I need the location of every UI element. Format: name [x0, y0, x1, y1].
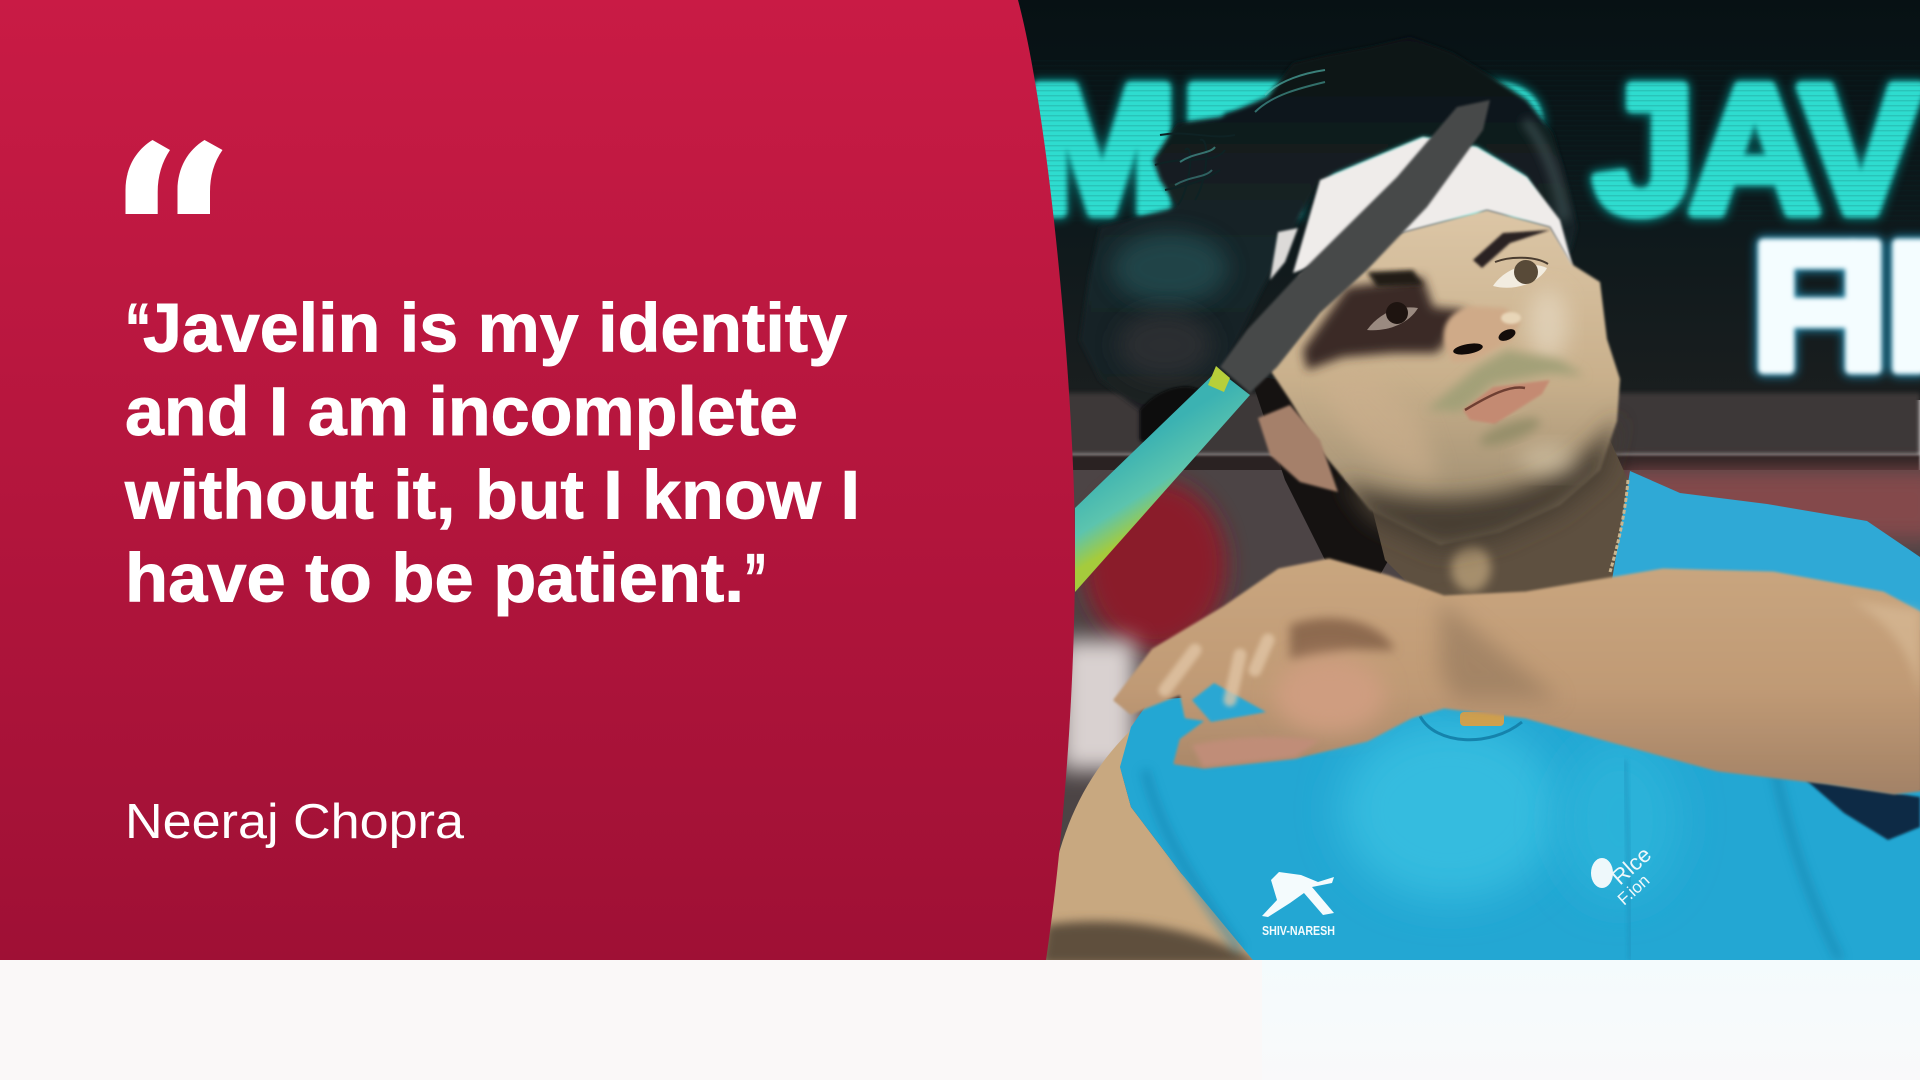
neck [1370, 440, 1628, 605]
photo: javelin thrower [1018, 0, 1920, 960]
scoreboard text [1034, 72, 1920, 384]
quote text: without it, but I know I [124, 456, 860, 534]
shirt logo: runner [1262, 872, 1335, 938]
shirt logo: runner: SHIV-NARESH [1262, 923, 1335, 938]
chin beard patch [1480, 414, 1542, 448]
javelin grip [1220, 100, 1490, 393]
javelin shadow across eyes [1303, 277, 1467, 370]
bottom strip tint [1262, 960, 1920, 1080]
scoreboard text: METER [1026, 47, 1547, 251]
forearm and hand [1115, 560, 1920, 793]
panel shape [0, 0, 1075, 960]
scoreboard text: JAV [1594, 47, 1920, 251]
lips [1463, 380, 1550, 424]
scoreboard scanlines [1036, 80, 1920, 220]
shirt logo: reliance: Rlce [1607, 842, 1656, 890]
quote text: ” [744, 540, 767, 616]
face [1270, 210, 1620, 552]
shirt logo: reliance [1591, 850, 1650, 906]
stadium background [1018, 0, 1920, 874]
nose [1444, 306, 1521, 362]
quote text: “ [125, 290, 151, 366]
necklace [1610, 480, 1628, 572]
hair wisps [1155, 70, 1325, 205]
scoreboard text: JAV [1594, 47, 1920, 251]
attribution: Neeraj Chopra [125, 795, 465, 849]
gold collar clasp [1460, 712, 1504, 726]
eyes and brows [1367, 230, 1550, 330]
quote text [124, 290, 860, 616]
javelin shaft [1075, 366, 1250, 592]
quote text: and I am incomplete [125, 373, 798, 450]
scoreboard text: METER [1026, 47, 1547, 251]
shirt upper [1612, 471, 1920, 630]
shirt lower [1120, 690, 1920, 965]
upper arm [1040, 730, 1262, 965]
shirt logo: reliance: F.ion [1614, 871, 1653, 909]
hair [1080, 37, 1577, 447]
moustache [1427, 350, 1585, 412]
quote text: have to be patient. [125, 540, 744, 616]
underarm shadow [1806, 780, 1920, 840]
headband [1270, 137, 1573, 280]
ear [1258, 405, 1338, 492]
hair behind neck [1255, 378, 1388, 574]
photo scene [1000, 0, 1920, 970]
icon: quotation mark [126, 140, 222, 214]
quote text: Javelin is my identity [143, 290, 847, 366]
